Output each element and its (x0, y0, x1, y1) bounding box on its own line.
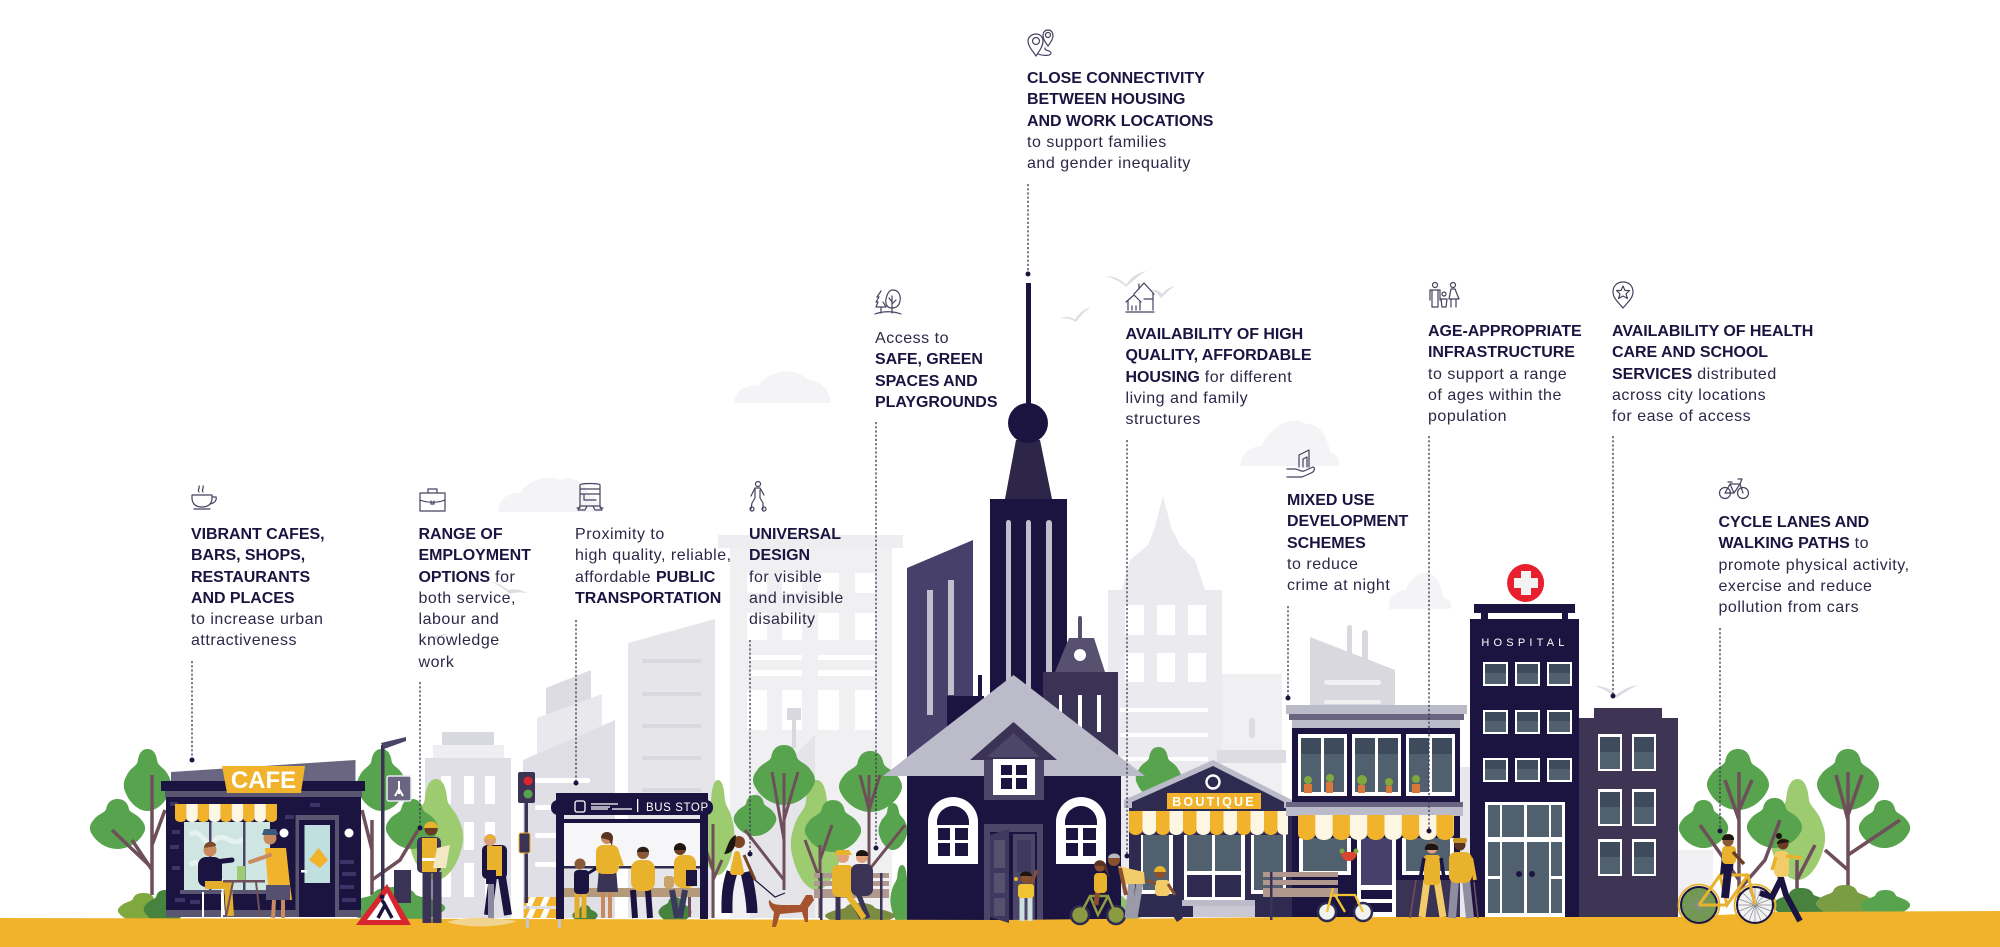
text: universal design: DESIGN (749, 547, 810, 564)
text: green spaces: PLAYGROUNDS (875, 394, 997, 411)
text: mixed use (1287, 492, 1408, 594)
text: employment options: knowledge (418, 632, 500, 649)
text: close connectivity (1027, 70, 1213, 172)
leader line (1716, 628, 1722, 834)
text: age-appropriate infrastructure: of ages within the (1428, 387, 1562, 404)
text: affordable housing: structures (1126, 411, 1201, 428)
bushes (118, 865, 1910, 925)
icon: houses (1125, 282, 1155, 313)
panel: health care and schools (1610, 281, 1813, 698)
side building (1579, 708, 1678, 917)
text: cycle lanes (1718, 512, 1910, 618)
text: employment options: OPTIONS for (418, 569, 515, 586)
leader line (1286, 606, 1290, 700)
warning sign (356, 884, 411, 925)
text: mixed use: to reduce (1287, 556, 1358, 573)
elderly couple (1410, 838, 1478, 918)
panel: vibrant cafes (190, 485, 325, 762)
icon: bus (576, 482, 604, 511)
panel: mixed use (1286, 449, 1408, 700)
traffic light (518, 772, 535, 903)
panel: employment options (418, 488, 531, 830)
panel: universal design (748, 480, 844, 856)
bus stop (551, 793, 713, 919)
leader line (1124, 440, 1130, 858)
icon: coffee cup (191, 485, 217, 510)
panel: green spaces (874, 289, 997, 850)
text: employment options (418, 526, 531, 671)
people at bus stop (574, 832, 697, 918)
panel: public transportation (574, 482, 732, 786)
icon: location star (1612, 281, 1634, 309)
text: health care and schools: SERVICES distributed (1612, 366, 1777, 383)
girl at door (990, 870, 1037, 923)
hospital (1470, 564, 1579, 918)
text: mixed use: MIXED USE (1287, 492, 1375, 509)
text: age-appropriate infrastructure (1428, 323, 1582, 425)
text: vibrant cafes: VIBRANT CAFES, (191, 526, 325, 543)
trees: middle park (702, 745, 1181, 918)
house (883, 675, 1145, 923)
text: age-appropriate infrastructure: AGE-APPROPRIATE (1428, 323, 1582, 340)
text: green spaces: SAFE, GREEN (875, 351, 983, 368)
text: affordable housing: AVAILABILITY OF HIGH (1126, 326, 1303, 343)
apartment building (1286, 705, 1467, 917)
text: mixed use: crime at night (1287, 577, 1390, 594)
panel: close connectivity (1026, 29, 1213, 276)
text: public transportation: TRANSPORTATION (575, 590, 721, 607)
panel: cycle lanes (1718, 478, 1914, 834)
text: affordable housing: living and family (1126, 390, 1248, 407)
icon: buildings on hand (1286, 449, 1316, 478)
text: age-appropriate infrastructure: INFRASTRUCTURE (1428, 344, 1575, 361)
text: affordable housing: QUALITY, AFFORDABLE (1126, 347, 1312, 364)
text: vibrant cafes: attractiveness (191, 632, 297, 649)
text: universal design: disability (749, 611, 816, 628)
leader line (574, 620, 578, 786)
text: age-appropriate infrastructure: to support a range (1428, 366, 1567, 383)
text: health care and schools (1612, 323, 1813, 425)
text: green spaces (875, 330, 997, 411)
text: public transportation: Proximity to (575, 526, 665, 543)
woman walking dog (724, 835, 814, 927)
text: green spaces: SPACES AND (875, 373, 978, 390)
leader line (190, 661, 194, 762)
text: affordable housing (1126, 326, 1312, 428)
boutique: BOUTIQUE (1172, 795, 1256, 809)
text: mixed use: DEVELOPMENT (1287, 513, 1408, 530)
text: vibrant cafes: BARS, SHOPS, (191, 547, 305, 564)
text: employment options: both service, (418, 590, 516, 607)
bus stop: BUS STOP (646, 802, 709, 814)
road barrier (524, 897, 562, 928)
bench and small bike (1263, 872, 1372, 921)
cafe (161, 760, 365, 917)
text: public transportation (575, 526, 732, 607)
street lamp and crossing sign (381, 737, 411, 910)
text: close connectivity: AND WORK LOCATIONS (1027, 113, 1213, 130)
trees: right park (1679, 749, 1910, 917)
child on bike with parent (1071, 854, 1145, 924)
trees: left of cafe (90, 749, 463, 895)
text: employment options: work (418, 654, 454, 671)
icon: family (1429, 282, 1460, 308)
text: public transportation: high quality, reliable, (575, 547, 732, 564)
text: cycle lanes: WALKING PATHS to (1718, 535, 1869, 552)
text: cycle lanes: exercise and reduce (1718, 578, 1872, 595)
background: clouds (498, 371, 1451, 609)
icon: map pins (1027, 29, 1054, 57)
text: employment options: labour and (418, 611, 499, 628)
cyclist (1678, 834, 1776, 926)
cafe customer and waitress (198, 829, 292, 918)
central tower (907, 283, 1118, 782)
text: universal design: for visible (749, 569, 822, 586)
leader line (1026, 184, 1030, 276)
text: close connectivity: and gender inequality (1027, 155, 1191, 172)
text: employment options: EMPLOYMENT (418, 547, 531, 564)
text: health care and schools: for ease of access (1612, 408, 1751, 425)
text: universal design (749, 526, 844, 628)
leader line (748, 640, 752, 856)
text: universal design: UNIVERSAL (749, 526, 841, 543)
text: affordable housing: HOUSING for different (1126, 369, 1292, 386)
text: vibrant cafes: to increase urban (191, 611, 323, 628)
text: close connectivity: to support families (1027, 134, 1167, 151)
panel: age-appropriate infrastructure (1426, 282, 1582, 834)
background: skyline (425, 496, 1713, 918)
leader line (418, 682, 422, 830)
text: cycle lanes: pollution from cars (1718, 599, 1859, 616)
text: age-appropriate infrastructure: population (1428, 408, 1507, 425)
icon: bicycle (1718, 478, 1748, 500)
workers (417, 822, 517, 926)
text: health care and schools: AVAILABILITY OF HEALTH (1612, 323, 1813, 340)
text: health care and schools: across city locations (1612, 387, 1766, 404)
text: mixed use: SCHEMES (1287, 535, 1366, 552)
text: vibrant cafes: RESTAURANTS (191, 569, 310, 586)
leader line (874, 422, 878, 850)
leader line (1610, 436, 1616, 698)
boutique (1124, 760, 1292, 917)
text: close connectivity: CLOSE CONNECTIVITY (1027, 70, 1205, 87)
hospital: HOSPITAL (1481, 637, 1569, 649)
text: cycle lanes: CYCLE LANES AND (1718, 514, 1869, 531)
running boy (1145, 866, 1180, 920)
leader line (1426, 436, 1432, 834)
bench with couple (814, 850, 889, 920)
icon: briefcase (419, 488, 446, 512)
text: close connectivity: BETWEEN HOUSING (1027, 91, 1185, 108)
text: cycle lanes: promote physical activity, (1718, 557, 1910, 574)
text: health care and schools: CARE AND SCHOOL (1612, 344, 1768, 361)
panel: affordable housing (1124, 282, 1312, 858)
text: green spaces: Access to (875, 330, 949, 347)
ground (0, 911, 2000, 947)
text: universal design: and invisible (749, 590, 844, 607)
cafe: CAFE (231, 767, 296, 794)
icon: trees (874, 289, 902, 315)
text: public transportation: affordable PUBLIC (575, 569, 715, 586)
text: vibrant cafes (191, 526, 325, 649)
text: employment options: RANGE OF (418, 526, 503, 543)
text: vibrant cafes: AND PLACES (191, 590, 295, 607)
runner (1760, 833, 1802, 921)
background: birds (415, 271, 1638, 698)
icon: walking person (749, 480, 767, 512)
